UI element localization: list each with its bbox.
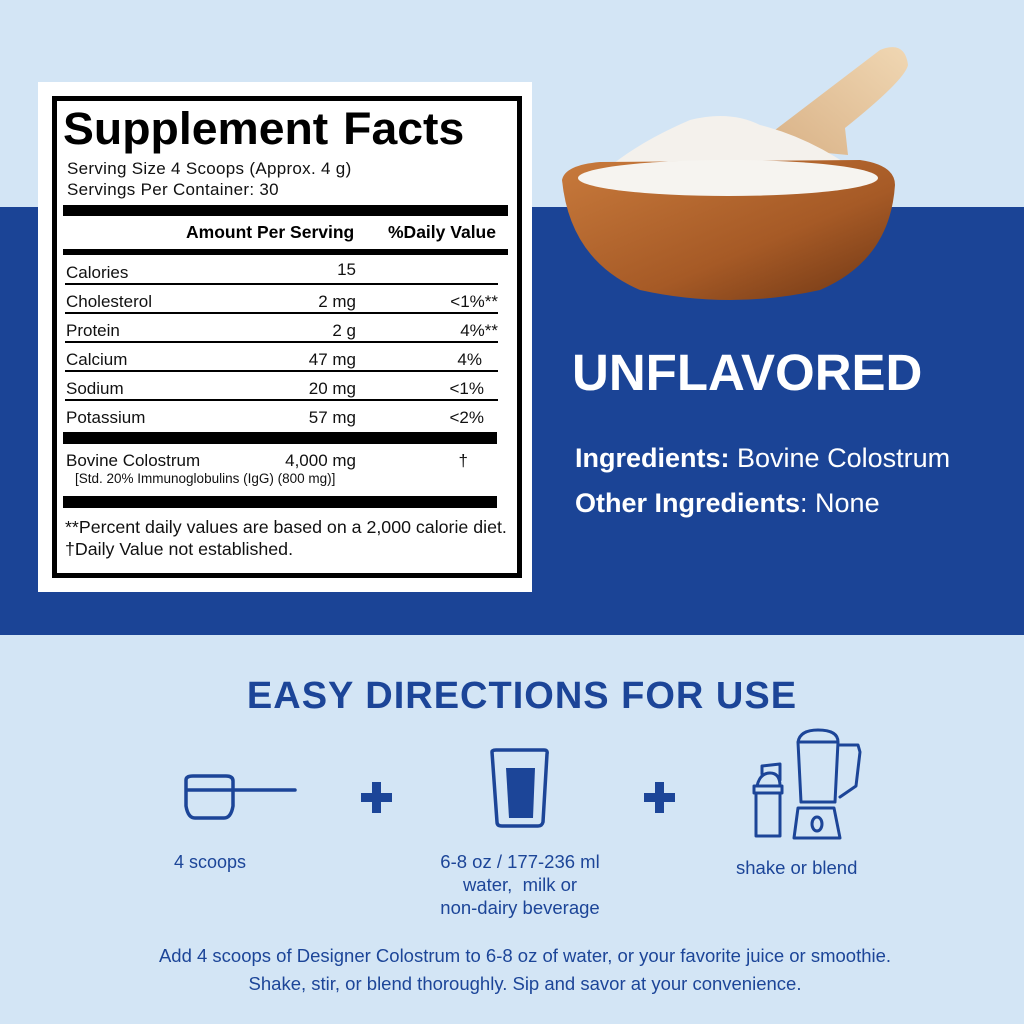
- heading: easy directions: EASY DIRECTIONS FOR USE: [247, 675, 797, 717]
- table header: Amount Per Serving: [186, 222, 354, 242]
- icon: plus 2: [644, 782, 675, 813]
- footnotes: [65, 517, 507, 559]
- instructions text: [159, 945, 891, 994]
- panel: supplement facts: [38, 82, 532, 592]
- nutrient rows: <2%: [450, 408, 484, 427]
- nutrient rows: 2 g: [332, 321, 356, 340]
- serving info: [67, 159, 352, 199]
- nutrient rows: <1%**: [450, 292, 498, 311]
- nutrient rows: 15: [337, 260, 356, 279]
- ingredients text: Other Ingredients: None: [575, 488, 880, 518]
- nutrient rows: Sodium: [66, 379, 124, 398]
- heading: unflavored: UNFLAVORED: [572, 344, 922, 401]
- bovine colostrum row: †: [459, 451, 468, 470]
- image: bowl of powder with scoop: [562, 47, 908, 300]
- nutrient rows: 4%: [457, 350, 482, 369]
- blue band: [0, 207, 1024, 635]
- nutrient rows: 2 mg: [318, 292, 356, 311]
- ingredients text: [575, 443, 950, 518]
- title: supplement facts: Supplement Facts: [63, 103, 464, 154]
- nutrient rows: Calories: [66, 263, 128, 282]
- nutrient rows: Cholesterol: [66, 292, 152, 311]
- serving info: Serving Size 4 Scoops (Approx. 4 g): [67, 159, 352, 178]
- nutrient rows: Protein: [66, 321, 120, 340]
- nutrient rows: Potassium: [66, 408, 145, 427]
- text: 6-8 oz / 177-236 ml: [440, 851, 600, 872]
- footnotes: **Percent daily values are based on a 2,000 calorie diet.: [65, 517, 507, 537]
- icon: plus 1: [361, 782, 392, 813]
- icon: shaker and blender: [754, 730, 860, 838]
- nutrient rows: 57 mg: [309, 408, 356, 427]
- instructions text: Shake, stir, or blend thoroughly. Sip and savor at your convenience.: [249, 973, 801, 994]
- instructions text: Add 4 scoops of Designer Colostrum to 6-8 oz of water, or your favorite juice or smoothie.: [159, 945, 891, 966]
- bovine colostrum row: 4,000 mg: [285, 451, 356, 470]
- captions: 4 scoops: [174, 852, 246, 872]
- text: water, milk or: [463, 874, 577, 895]
- nutrient rows: [66, 260, 498, 427]
- text: %Daily Value: [388, 222, 496, 242]
- nutrient rows: 20 mg: [309, 379, 356, 398]
- nutrient rows: Calcium: [66, 350, 127, 369]
- bovine colostrum row: Bovine Colostrum: [66, 451, 200, 470]
- ingredients text: Ingredients: Bovine Colostrum: [575, 443, 950, 473]
- bovine colostrum row: [Std. 20% Immunoglobulins (IgG) (800 mg)]: [75, 471, 335, 486]
- footnotes: †Daily Value not established.: [65, 539, 293, 559]
- icon: scoop: [186, 776, 295, 818]
- nutrient rows: 47 mg: [309, 350, 356, 369]
- nutrient rows: 4%**: [460, 321, 498, 340]
- text: shake or blend: [736, 857, 857, 878]
- bovine colostrum row: [66, 451, 468, 486]
- nutrient rows: <1%: [450, 379, 484, 398]
- icons row: [184, 728, 862, 840]
- text: non-dairy beverage: [440, 897, 600, 918]
- serving info: Servings Per Container: 30: [67, 180, 279, 199]
- icon: glass: [492, 750, 547, 826]
